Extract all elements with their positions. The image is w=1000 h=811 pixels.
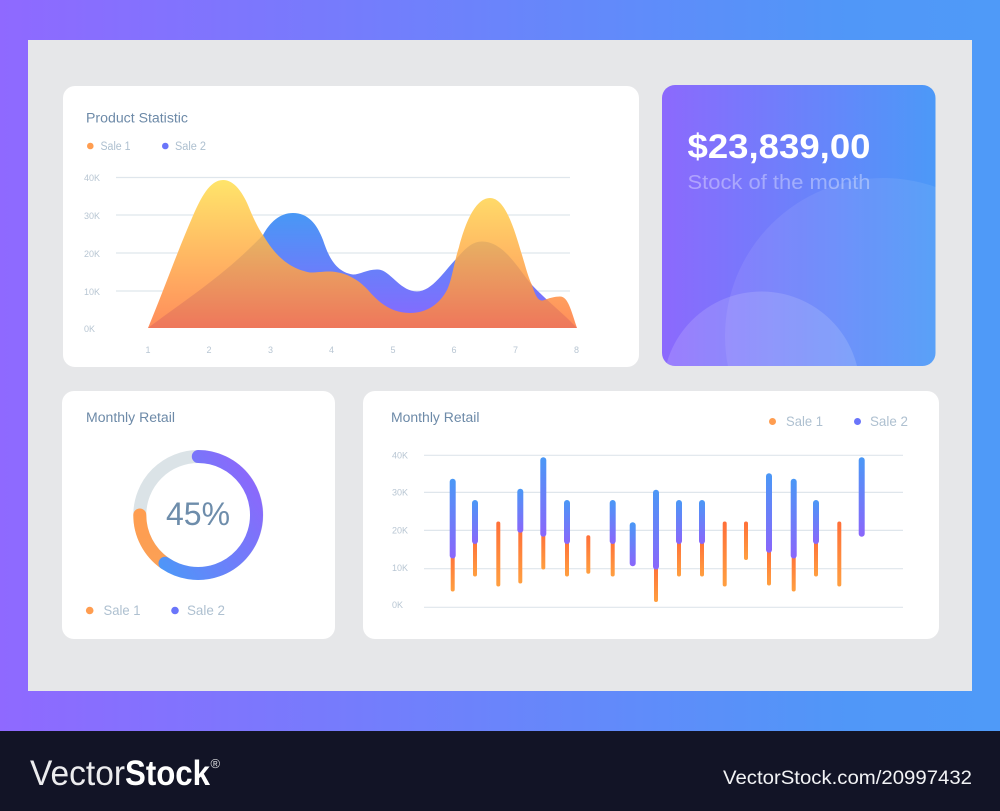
legend: sale 1 and sale 2: Sale 1 <box>104 602 141 618</box>
legend: sale 1 and sale 2 <box>769 413 908 429</box>
area chart: 40K <box>84 173 100 183</box>
footer bar <box>0 731 1000 811</box>
panel: stock of the month <box>662 85 936 366</box>
legend: sale 1 and sale 2: Sale 2 <box>175 141 206 153</box>
area chart: 0K <box>84 324 95 334</box>
heading: product statistic: Product Statistic <box>86 110 188 126</box>
area chart: 8 <box>574 345 579 355</box>
legend: sale 1 and sale 2 <box>86 602 225 618</box>
range bar chart: 30K <box>392 488 408 498</box>
range bar chart: 0K <box>392 600 403 610</box>
range bar chart: 40K <box>392 450 408 460</box>
area chart: 6 <box>451 345 457 355</box>
area chart: 20K <box>84 249 100 259</box>
brand logo text <box>30 754 220 793</box>
legend: sale 1 and sale 2: Sale 1 <box>786 413 823 429</box>
area chart: 10K <box>84 287 100 297</box>
legend: sale 1 and sale 2 <box>87 141 206 153</box>
area chart: 2 <box>206 345 212 355</box>
area chart: 3 <box>268 345 273 355</box>
legend: sale 1 and sale 2: Sale 2 <box>870 413 908 429</box>
donut chart <box>140 456 257 574</box>
brand logo text: Stock <box>125 754 210 793</box>
grey dashboard panel <box>28 40 972 691</box>
heading: monthly retail: Monthly Retail <box>391 410 480 425</box>
decorative circles <box>667 178 936 366</box>
legend: sale 1 and sale 2: Sale 1 <box>100 141 130 153</box>
caption: Stock of the month <box>688 172 870 194</box>
area chart <box>84 173 579 355</box>
range bar chart: 10K <box>392 563 408 573</box>
area chart: 7 <box>513 345 518 355</box>
brand logo text: ® <box>210 756 220 771</box>
panel: monthly retail donut <box>62 391 335 639</box>
area chart: 4 <box>329 345 334 355</box>
area chart: 1 <box>145 345 151 355</box>
area chart: 30K <box>84 211 100 221</box>
panel: monthly retail bars <box>363 391 939 639</box>
legend: sale 1 and sale 2: Sale 2 <box>187 602 225 618</box>
range bar chart: 20K <box>392 526 408 536</box>
image id text: VectorStock.com/20997432 <box>723 768 972 789</box>
amount: $23,839,00 <box>688 128 870 166</box>
range bar chart <box>392 450 903 610</box>
area chart: 5 <box>390 345 396 355</box>
brand logo text: Vector <box>30 754 125 793</box>
percentage: 45% <box>166 496 230 532</box>
panel: product statistic <box>63 86 639 367</box>
heading: monthly retail: Monthly Retail <box>86 410 175 425</box>
